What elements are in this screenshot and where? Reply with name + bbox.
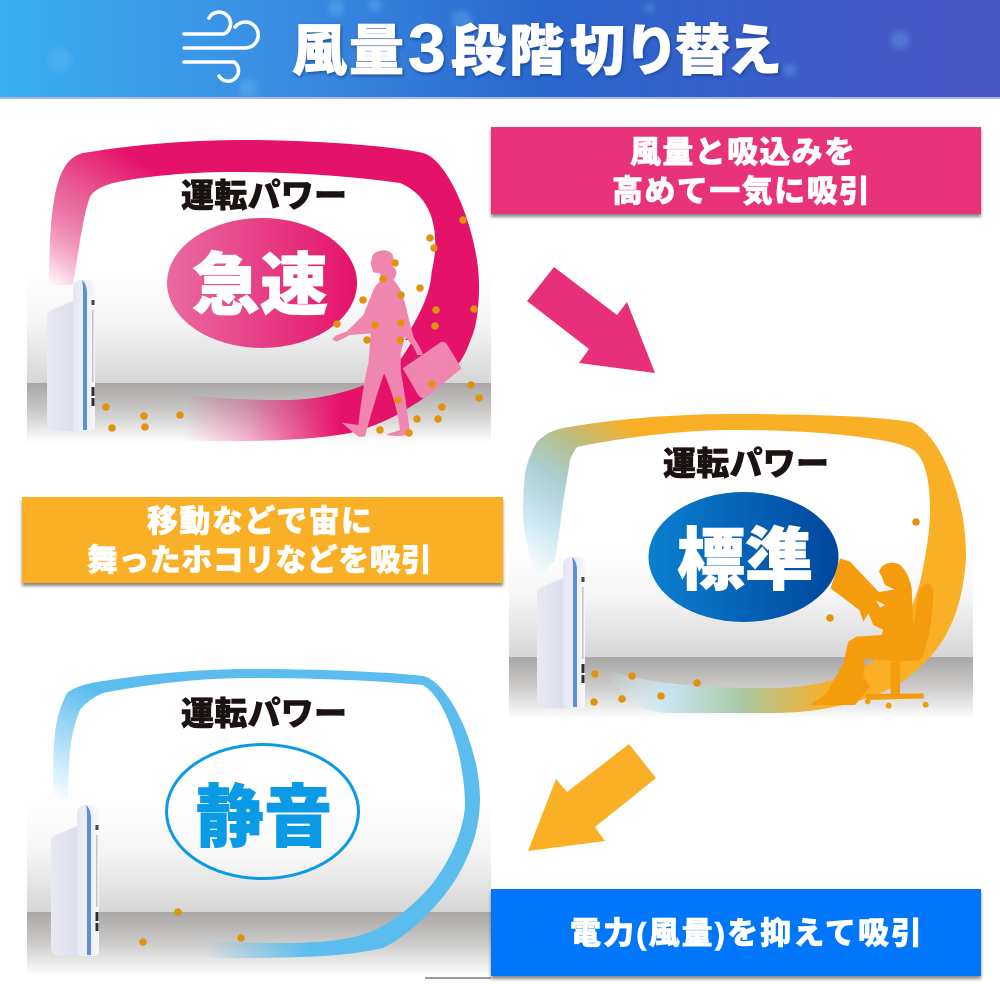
banner: pink caption — [491, 127, 981, 214]
title: 3 — [408, 10, 446, 86]
airflow loop: blue — [53, 669, 480, 958]
dust particles — [102, 216, 483, 437]
panel: standard mode — [509, 414, 973, 719]
arrow: orange — [528, 744, 656, 851]
arrow: pink — [527, 267, 655, 373]
banner: blue caption — [425, 889, 981, 979]
heading: operating power: 運転パワー — [181, 177, 347, 214]
icon: wind — [184, 12, 258, 81]
banner: orange caption: 移動などで宙に — [147, 504, 372, 539]
header band — [0, 0, 1000, 99]
silhouette: walking woman — [332, 250, 462, 437]
heading: operating power: 運転パワー — [663, 445, 829, 482]
silhouette: seated woman — [810, 558, 933, 709]
badge: rapid — [167, 218, 357, 348]
room background — [509, 545, 973, 719]
banner: orange caption: 舞ったホコリなどを吸引 — [87, 543, 432, 578]
banner: pink caption: 高めて一気に吸引 — [612, 174, 870, 209]
dust particles — [590, 518, 920, 706]
panel: silent mode — [27, 669, 491, 976]
banner: pink caption: 風量と吸込みを — [630, 135, 855, 170]
airflow loop: orange — [523, 414, 966, 713]
icon: air purifier — [51, 805, 99, 956]
badge: standard — [648, 492, 838, 622]
title: 段階切り替え — [451, 20, 782, 82]
badge: silent — [166, 744, 358, 878]
icon: air purifier — [47, 280, 95, 431]
title: 風量 — [292, 20, 404, 82]
banner: orange caption — [22, 497, 503, 583]
badge: rapid: 急速 — [192, 248, 328, 324]
badge: silent: 静音 — [196, 780, 332, 856]
airflow loop: pink — [49, 140, 479, 441]
panel: rapid mode — [27, 140, 491, 443]
room background — [27, 800, 491, 976]
icon: air purifier — [537, 557, 585, 708]
room background — [27, 270, 491, 443]
dust particles — [139, 908, 245, 946]
heading: operating power: 運転パワー — [181, 695, 347, 732]
banner: blue caption: 電力(風量)を抑えて吸引 — [570, 916, 922, 951]
badge: standard: 標準 — [677, 523, 813, 599]
